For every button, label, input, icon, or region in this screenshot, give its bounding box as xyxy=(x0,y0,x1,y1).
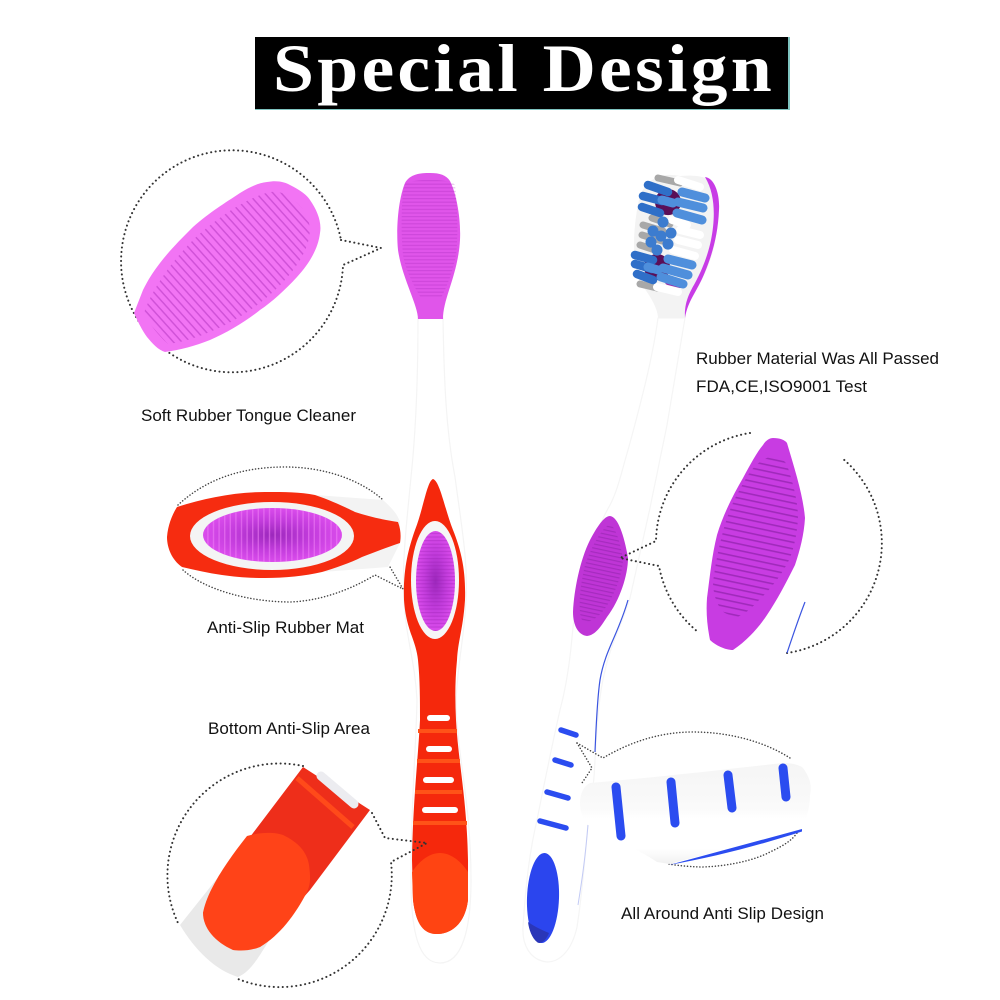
thin blue lines xyxy=(595,600,628,752)
purple pad xyxy=(416,531,455,631)
orange band xyxy=(297,778,353,827)
blue line xyxy=(669,829,802,865)
label: tongue cleaner: Soft Rubber Tongue Cleaner xyxy=(141,406,356,425)
orange end xyxy=(203,833,310,951)
callout: tongue cleaner xyxy=(121,150,381,372)
text: material note: FDA,CE,ISO9001 Test xyxy=(696,377,867,396)
callout: bottom area xyxy=(167,763,427,987)
callout: purple pad xyxy=(620,433,882,653)
bristles xyxy=(635,178,705,292)
blue line xyxy=(787,602,805,653)
blue stripes xyxy=(616,768,786,836)
red brush white body xyxy=(403,318,471,963)
red shape xyxy=(167,492,401,578)
purple back edge xyxy=(685,177,719,318)
purple mat xyxy=(203,508,342,562)
dotted bubble xyxy=(167,763,303,923)
callout: rubber mat xyxy=(167,467,403,602)
white ring xyxy=(411,521,459,639)
label: bottom anti-slip: Bottom Anti-Slip Area xyxy=(208,719,371,738)
dotted bubble xyxy=(178,467,382,505)
toothbrush: red back view xyxy=(397,173,471,963)
toothbrush: white with bristles xyxy=(523,175,719,962)
red brush grip xyxy=(404,479,468,934)
text: material note xyxy=(696,349,939,396)
red sleeve xyxy=(203,767,370,950)
white ring xyxy=(190,502,354,570)
head xyxy=(634,175,718,318)
pink tongue cleaner head xyxy=(397,173,460,319)
title: Special Design xyxy=(273,30,775,106)
inset: pink head xyxy=(134,181,320,352)
label: all around: All Around Anti Slip Design xyxy=(621,904,824,923)
purple pad xyxy=(573,516,628,636)
white grip slots xyxy=(422,715,458,813)
callout: all around grip xyxy=(577,732,811,867)
dotted bubble xyxy=(577,732,790,758)
light handle xyxy=(315,495,400,572)
dotted bubble xyxy=(620,433,750,632)
blue oval xyxy=(525,852,561,944)
white body xyxy=(523,318,685,962)
grey end xyxy=(180,837,300,977)
label: rubber mat: Anti-Slip Rubber Mat xyxy=(207,618,364,637)
blue grip slots xyxy=(540,730,576,828)
purple inset xyxy=(707,438,805,650)
white piece xyxy=(580,763,811,864)
red brush orange end xyxy=(412,853,468,934)
dotted bubble xyxy=(121,150,381,372)
text: material note: Rubber Material Was All Passed xyxy=(696,349,939,368)
orange bands xyxy=(413,729,467,825)
white slot xyxy=(321,776,354,804)
